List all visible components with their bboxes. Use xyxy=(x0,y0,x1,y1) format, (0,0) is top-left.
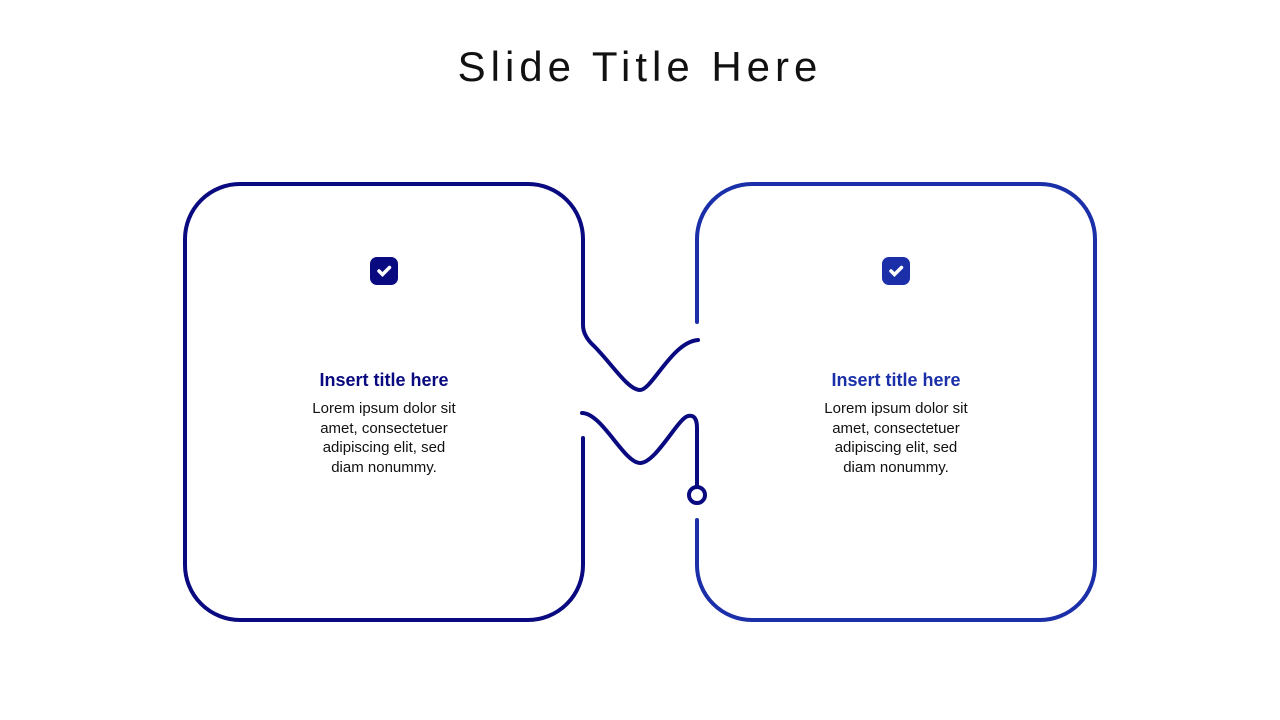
panel: right box outline xyxy=(697,184,1095,620)
panel: left box outline xyxy=(185,184,705,620)
text block: left: diam nonummy. xyxy=(331,458,437,476)
text block: right: adipiscing elit, sed xyxy=(835,439,957,456)
text block: right: diam nonummy. xyxy=(843,458,949,476)
text block: right: amet, consectetuer xyxy=(832,420,960,436)
text block: left xyxy=(312,370,456,476)
text block: right: Lorem ipsum dolor sit xyxy=(824,400,968,417)
text block: left: Lorem ipsum dolor sit xyxy=(312,400,456,417)
title: Slide Title Here xyxy=(458,43,822,90)
text block: left: amet, consectetuer xyxy=(320,420,448,436)
text block: left: Insert title here xyxy=(319,370,449,390)
icon: left check xyxy=(370,257,398,285)
icon: right check xyxy=(882,257,910,285)
text block: right: Insert title here xyxy=(831,370,961,390)
text block: right xyxy=(824,370,968,476)
text block: left: adipiscing elit, sed xyxy=(323,439,445,456)
